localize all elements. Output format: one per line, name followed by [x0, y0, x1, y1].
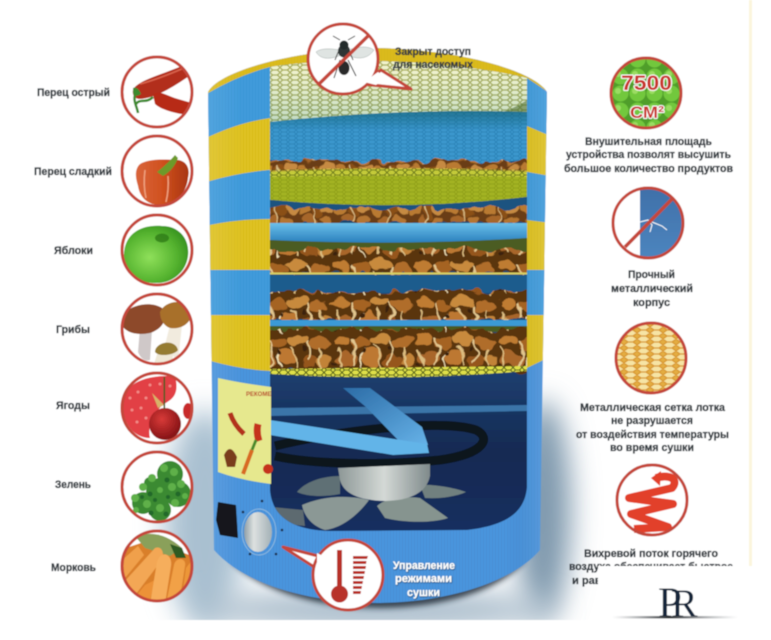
product label sticker [218, 378, 273, 484]
text: metal mesh [576, 402, 729, 454]
chamber [270, 370, 527, 535]
fan assembly [270, 388, 527, 530]
tray 3 blue [270, 223, 527, 243]
icon: fly [316, 36, 374, 78]
window base [269, 160, 528, 370]
mushrooms row 3 [255, 249, 545, 273]
food item: berries [122, 373, 193, 443]
caption: insect protection: для насекомых [393, 59, 474, 71]
food item: hot pepper [122, 57, 192, 127]
food item: carrots [120, 531, 192, 604]
power switch [216, 502, 238, 538]
icon: no cracks metal body [613, 185, 685, 260]
icon: thermometer [331, 550, 368, 602]
text: metal body: Прочный [628, 269, 675, 281]
label: mushrooms: Грибы [56, 324, 90, 336]
label: carrots: Морковь [51, 562, 96, 574]
label: greens: Зелень [55, 479, 91, 491]
lower blade [270, 420, 429, 455]
area value: СМ² [630, 103, 664, 122]
label: berries: Ягоды [56, 400, 90, 412]
area value: 7500 [621, 72, 672, 95]
caption: drying mode control: Управление [393, 560, 455, 572]
label: sweet pepper: Перец сладкий [34, 166, 112, 178]
horizontal rail [270, 405, 527, 416]
logo: P [658, 580, 682, 627]
mushrooms row 1 [255, 161, 545, 175]
fan blades [297, 476, 340, 496]
text: metal mesh: не разрушается [611, 415, 693, 427]
text: metal body: корпус [633, 297, 670, 309]
text: metal mesh: Металлическая сетка лотка [580, 402, 726, 414]
temperature scale [353, 556, 368, 594]
text: large area: устройства позволят высушить [566, 149, 731, 161]
text: large area: большое количество продуктов [564, 163, 733, 175]
temperature knob [242, 500, 283, 555]
callout: drying mode control [283, 540, 383, 610]
label: hot pepper: Перец острый [37, 87, 110, 99]
food item: greens [122, 452, 192, 522]
caption: drying mode control [393, 560, 455, 599]
area value [621, 72, 672, 122]
text: vortex air flow: Вихревой поток горячего [584, 548, 718, 560]
blue gap [270, 275, 527, 293]
mushrooms row 5 [270, 326, 527, 332]
food item: mushrooms [120, 294, 192, 365]
mushrooms row 2 [255, 208, 545, 223]
white cover patch [598, 566, 771, 640]
food item: sweet pepper [122, 136, 192, 206]
motor cup [338, 464, 430, 501]
logo: R [671, 581, 698, 626]
text: vortex air flow [569, 548, 733, 587]
label: apples: Яблоки [54, 245, 93, 257]
right wall bands [526, 80, 547, 368]
text: metal body: металлический [611, 283, 693, 295]
caption: drying mode control: режимами [395, 573, 452, 585]
cut-away window with trays [269, 60, 528, 532]
green gap [270, 236, 527, 252]
text: vortex air flow: воздуха обеспечивает быстрое [569, 561, 733, 573]
text: large area: Внушительная площадь [585, 136, 712, 148]
caption: insect protection [393, 46, 474, 71]
food item: apple [122, 215, 192, 285]
mesh under row 5 [270, 366, 527, 377]
floor shadow [230, 560, 525, 608]
text: large area [564, 136, 733, 175]
top rim [208, 48, 546, 94]
caption: drying mode control: сушки [407, 587, 440, 599]
upper blade [343, 388, 428, 445]
top mesh lid [269, 60, 528, 123]
dryer body [200, 40, 560, 610]
dark gap [270, 196, 526, 212]
tray 2 yellow-green mesh [270, 169, 527, 205]
caption: insect protection: Закрыт доступ [395, 46, 471, 58]
tray 1 blue mesh [270, 111, 527, 166]
logo [612, 580, 738, 627]
text: metal mesh: во время сушки [610, 442, 694, 454]
callout: insect protection [308, 24, 411, 94]
text: vortex air flow: и равномерное высыхание [572, 575, 722, 587]
icon: metal mesh [616, 323, 686, 393]
product label sticker: РЕКОМЕ [246, 392, 271, 398]
text: metal mesh: от воздействия температуры [576, 429, 729, 441]
mushrooms row 4 [255, 291, 545, 321]
left wall bands [200, 67, 270, 371]
dark ring [275, 425, 484, 463]
icon: 7500 cm2 area [611, 58, 681, 128]
icon: vortex air flow [617, 465, 687, 535]
text: metal body [611, 269, 693, 309]
